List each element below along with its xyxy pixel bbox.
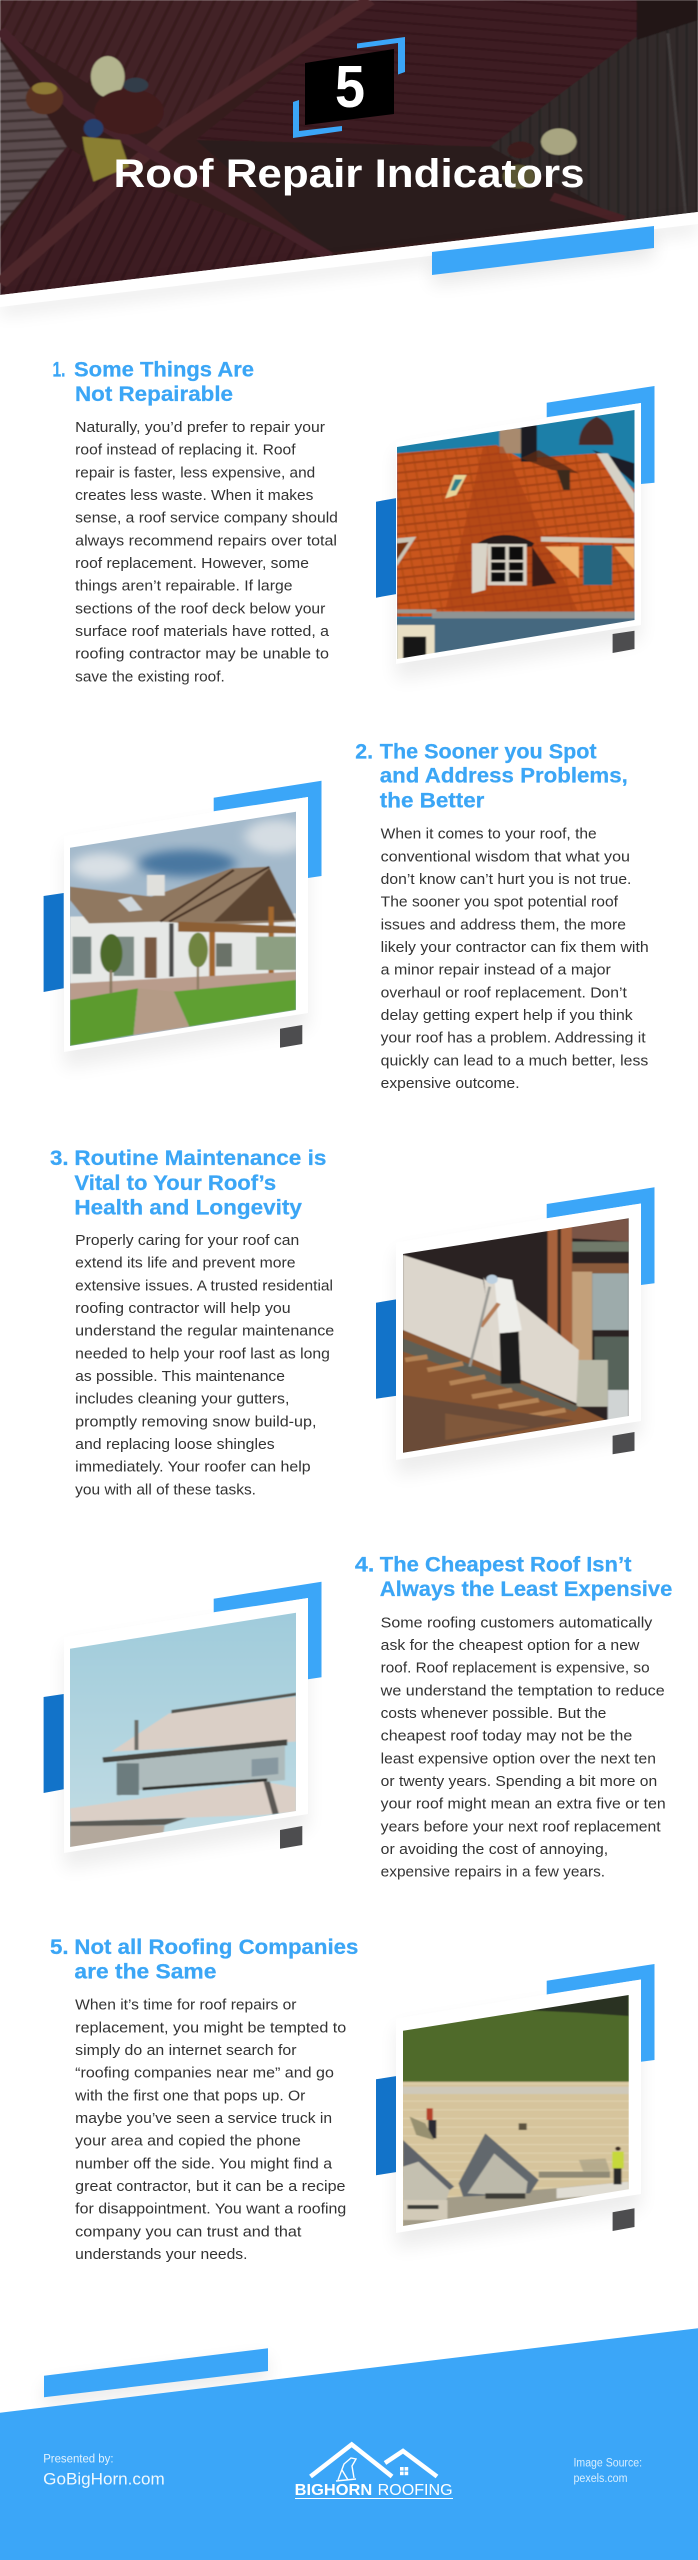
image frame 4: [44, 1582, 321, 1869]
footer: [0, 2328, 698, 2560]
body text 3: needed to help your roof last as long: [75, 1346, 330, 1362]
body text 5: replacement, you might be tempted to: [75, 2020, 346, 2036]
heading 4: 4.: [355, 1554, 374, 1577]
body text 1: Naturally, you’d prefer to repair your: [75, 420, 325, 436]
body text 2: a minor repair instead of a major: [381, 963, 611, 979]
body text 1: surface roof materials have rotted, a: [75, 624, 330, 640]
heading 2: 2.: [355, 740, 373, 763]
body text 1: roof instead of replacing it. Roof: [75, 443, 297, 459]
body text 4: or twenty years. Spending a bit more on: [381, 1774, 657, 1790]
body text 4: costs whenever possible. But the: [381, 1706, 606, 1722]
heading 1: Some Things Are: [74, 359, 254, 382]
body text 2: The sooner you spot potential roof: [381, 895, 619, 911]
body text 4: expensive repairs in a few years.: [381, 1865, 605, 1881]
logo: Bighorn Roofing: ROOFING: [378, 2482, 453, 2499]
heading 5: are the Same: [74, 1961, 216, 1984]
body text 3: understand the regular maintenance: [75, 1324, 334, 1340]
heading 2: The Sooner you Spot: [380, 740, 597, 763]
header accent bar: [432, 226, 654, 285]
body text 5: understands your needs.: [75, 2247, 248, 2263]
body text 5: [74, 1998, 346, 2263]
presented by: [43, 2454, 165, 2488]
heading 5: 5.: [50, 1936, 69, 1959]
body text 1: things aren’t repairable. If large: [75, 579, 292, 595]
body text 4: Some roofing customers automatically: [381, 1615, 653, 1631]
body text 3: [75, 1233, 334, 1498]
body text 5: maybe you’ve seen a service truck in: [75, 2111, 332, 2127]
logo: Bighorn Roofing: [295, 2444, 453, 2499]
section 3: [50, 1147, 654, 1498]
body text 4: cheapest roof today may not be the: [381, 1729, 632, 1745]
body text 2: expensive outcome.: [381, 1076, 520, 1092]
body text 5: number off the side. You might find a: [75, 2156, 333, 2172]
heading 1: Not Repairable: [75, 383, 233, 406]
heading 3: Routine Maintenance is: [74, 1147, 326, 1170]
body text 3: immediately. Your roofer can help: [75, 1460, 311, 1476]
body text 3: extend its life and prevent more: [75, 1256, 296, 1272]
body text 1: sections of the roof deck below your: [75, 601, 326, 617]
body text 3: extensive issues. A trusted residential: [75, 1278, 333, 1294]
body text 3: as possible. This maintenance: [75, 1369, 285, 1385]
body text 2: conventional wisdom that what you: [381, 849, 630, 865]
body text 1: roofing contractor may be unable to: [75, 647, 329, 663]
body text 4: or avoiding the cost of annoying,: [381, 1842, 608, 1858]
body text 4: years before your next roof replacement: [381, 1819, 661, 1835]
heading 5: Not all Roofing Companies: [74, 1936, 358, 1959]
section 4: [44, 1554, 672, 1881]
body text 4: ask for the cheapest option for a new: [381, 1638, 640, 1654]
photo: worker cleaning a roof: [401, 1217, 632, 1457]
heading 1: [52, 359, 254, 406]
image frame 1: [376, 386, 654, 680]
body text 4: your roof might mean an extra five or ten: [381, 1797, 666, 1813]
body text 3: roofing contractor will help you: [75, 1301, 291, 1317]
body text 5: company you can trust and that: [75, 2224, 301, 2240]
number badge: 5: [335, 54, 365, 120]
body text 2: issues and address them, the more: [381, 917, 626, 933]
body text 1: [75, 420, 338, 685]
body text 3: promptly removing snow build-up,: [75, 1414, 316, 1430]
body text 3: includes cleaning your gutters,: [75, 1392, 289, 1408]
heading 1: 1.: [52, 359, 66, 382]
image frame 3: [376, 1187, 654, 1476]
body text 4: [380, 1615, 666, 1881]
heading 3: Health and Longevity: [74, 1196, 302, 1219]
body text 5: for disappointment. You want a roofing: [75, 2202, 346, 2218]
heading 3: Vital to Your Roof’s: [74, 1172, 276, 1195]
photo: beige roofs against sky: [67, 1610, 298, 1850]
heading 4: Always the Least Expensive: [380, 1578, 672, 1601]
footer accent bar: [44, 2348, 268, 2406]
body text 2: When it comes to your roof, the: [381, 827, 597, 843]
body text 3: Properly caring for your roof can: [75, 1233, 299, 1249]
body text 5: with the first one that pops up. Or: [74, 2088, 306, 2104]
heading 3: 3.: [50, 1147, 69, 1170]
body text 5: “roofing companies near me” and go: [75, 2066, 334, 2082]
body text 4: least expensive option over the next ten: [381, 1751, 656, 1767]
header white edge: [0, 212, 698, 315]
section 5: [50, 1936, 654, 2263]
heading 2: and Address Problems,: [380, 765, 628, 788]
photo: house with lawn: [67, 810, 307, 1050]
photo: workers on large roof: [401, 1993, 632, 2228]
image source: pexels.com: [574, 2473, 628, 2485]
body text 2: overhaul or roof replacement. Don’t: [381, 985, 627, 1001]
section 2: [44, 740, 649, 1092]
body text 5: your area and copied the phone: [75, 2134, 301, 2150]
heading 2: the Better: [380, 789, 484, 812]
number badge: [293, 37, 405, 138]
logo: Bighorn Roofing: BIGHORN: [295, 2482, 372, 2499]
image source: [574, 2458, 642, 2485]
body text 5: simply do an internet search for: [75, 2043, 297, 2059]
body text 2: likely your contractor can fix them with: [381, 940, 649, 956]
image frame 2: [44, 781, 321, 1068]
presented by: Presented by:: [43, 2454, 114, 2466]
heading 4: [355, 1554, 672, 1601]
header: [0, 0, 698, 320]
title: Roof Repair Indicators: [114, 152, 584, 196]
body text 3: and replacing loose shingles: [75, 1437, 275, 1453]
body text 2: your roof has a problem. Addressing it: [381, 1031, 646, 1047]
body text 5: great contractor, but it can be a recipe: [75, 2179, 345, 2195]
header photo: roof and workers: [0, 0, 698, 320]
presented by: GoBigHorn.com: [43, 2469, 165, 2488]
body text 2: [381, 827, 649, 1092]
body text 1: save the existing roof.: [75, 669, 225, 685]
body text 3: you with all of these tasks.: [75, 1482, 256, 1498]
heading 4: The Cheapest Roof Isn’t: [380, 1554, 631, 1577]
section 1: [52, 359, 654, 685]
heading 5: [50, 1936, 358, 1984]
body text 2: don’t know can’t hurt you is not true.: [381, 872, 631, 888]
body text 1: roof replacement. However, some: [75, 556, 309, 572]
heading 2: [355, 740, 628, 812]
heading 3: [50, 1147, 326, 1219]
body text 2: quickly can lead to a much better, less: [381, 1053, 648, 1069]
body text 1: repair is faster, less expensive, and: [75, 465, 315, 481]
body text 2: delay getting expert help if you think: [381, 1008, 634, 1024]
body text 5: When it’s time for roof repairs or: [75, 1998, 297, 2014]
footer background: [0, 2328, 698, 2560]
body text 1: creates less waste. When it makes: [75, 488, 313, 504]
body text 4: roof. Roof replacement is expensive, so: [381, 1661, 650, 1677]
image frame 5: [376, 1964, 654, 2249]
body text 4: we understand the temptation to reduce: [380, 1683, 665, 1699]
image source: Image Source:: [574, 2458, 642, 2470]
photo: orange tiled roof: [392, 407, 641, 663]
body text 1: always recommend repairs over total: [75, 533, 337, 549]
body text 1: sense, a roof service company should: [75, 511, 338, 527]
